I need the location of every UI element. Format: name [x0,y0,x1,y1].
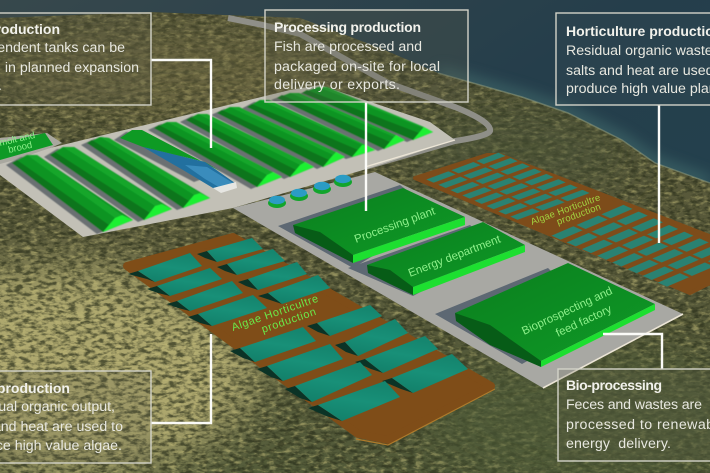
hall bright gable ends [103,127,433,232]
algae pad label: Algae Horticultre [230,293,321,334]
fish production halls [6,87,433,234]
callout: bio-processing: energy delivery. [566,436,671,452]
pad: horticulture production [415,151,710,293]
smolt and brood building: brood [7,140,33,156]
building: bioprospecting and feed factory [435,263,655,367]
shallow water glow along the coast [438,73,710,183]
platform access edge [365,140,455,167]
hall shaded sides [12,90,419,232]
building: energy department [348,222,525,296]
callout: bio-processing: Feces and wastes are [566,397,702,413]
round holding tanks [268,175,352,208]
processing platform [233,172,683,388]
building: energy department: Energy department [407,233,503,280]
callout: processing production: Fish are processed and [274,39,422,55]
building: bioprospecting and feed factory: feed factory [554,303,614,340]
callout: processing production [265,10,468,102]
callout: algae production [0,371,151,463]
callout: bio-processing [558,369,710,461]
callout: processing production: packaged on-site for local [274,59,440,75]
platform front edge [543,314,683,388]
pad: algae horticulture production [127,237,495,445]
connector lines [151,60,662,423]
hall crest highlights [27,87,424,218]
callout: fish production [0,13,151,105]
hall bodies [12,87,433,232]
open hall with visible fish tanks [120,130,237,193]
building: bioprospecting and feed factory: Bioprospecting and [520,285,615,338]
fish farm platform [0,85,455,237]
shoreline [438,73,710,183]
smolt and brood building [0,130,62,164]
algae greenhouses [128,238,468,421]
access road [228,18,490,167]
callout: bio-processing: Bio-processing [566,377,662,393]
callout: processing production: delivery or exports. [274,77,400,93]
horticulture pad label: production [555,202,603,228]
horticulture pad label: Algae Horticultre [529,192,602,228]
building: processing plant: Processing plant [353,205,438,246]
callout: processing production: Processing production [274,19,421,35]
callout: horticulture production [556,13,710,105]
building: processing plant [278,185,465,268]
algae pad label: production [260,306,318,336]
